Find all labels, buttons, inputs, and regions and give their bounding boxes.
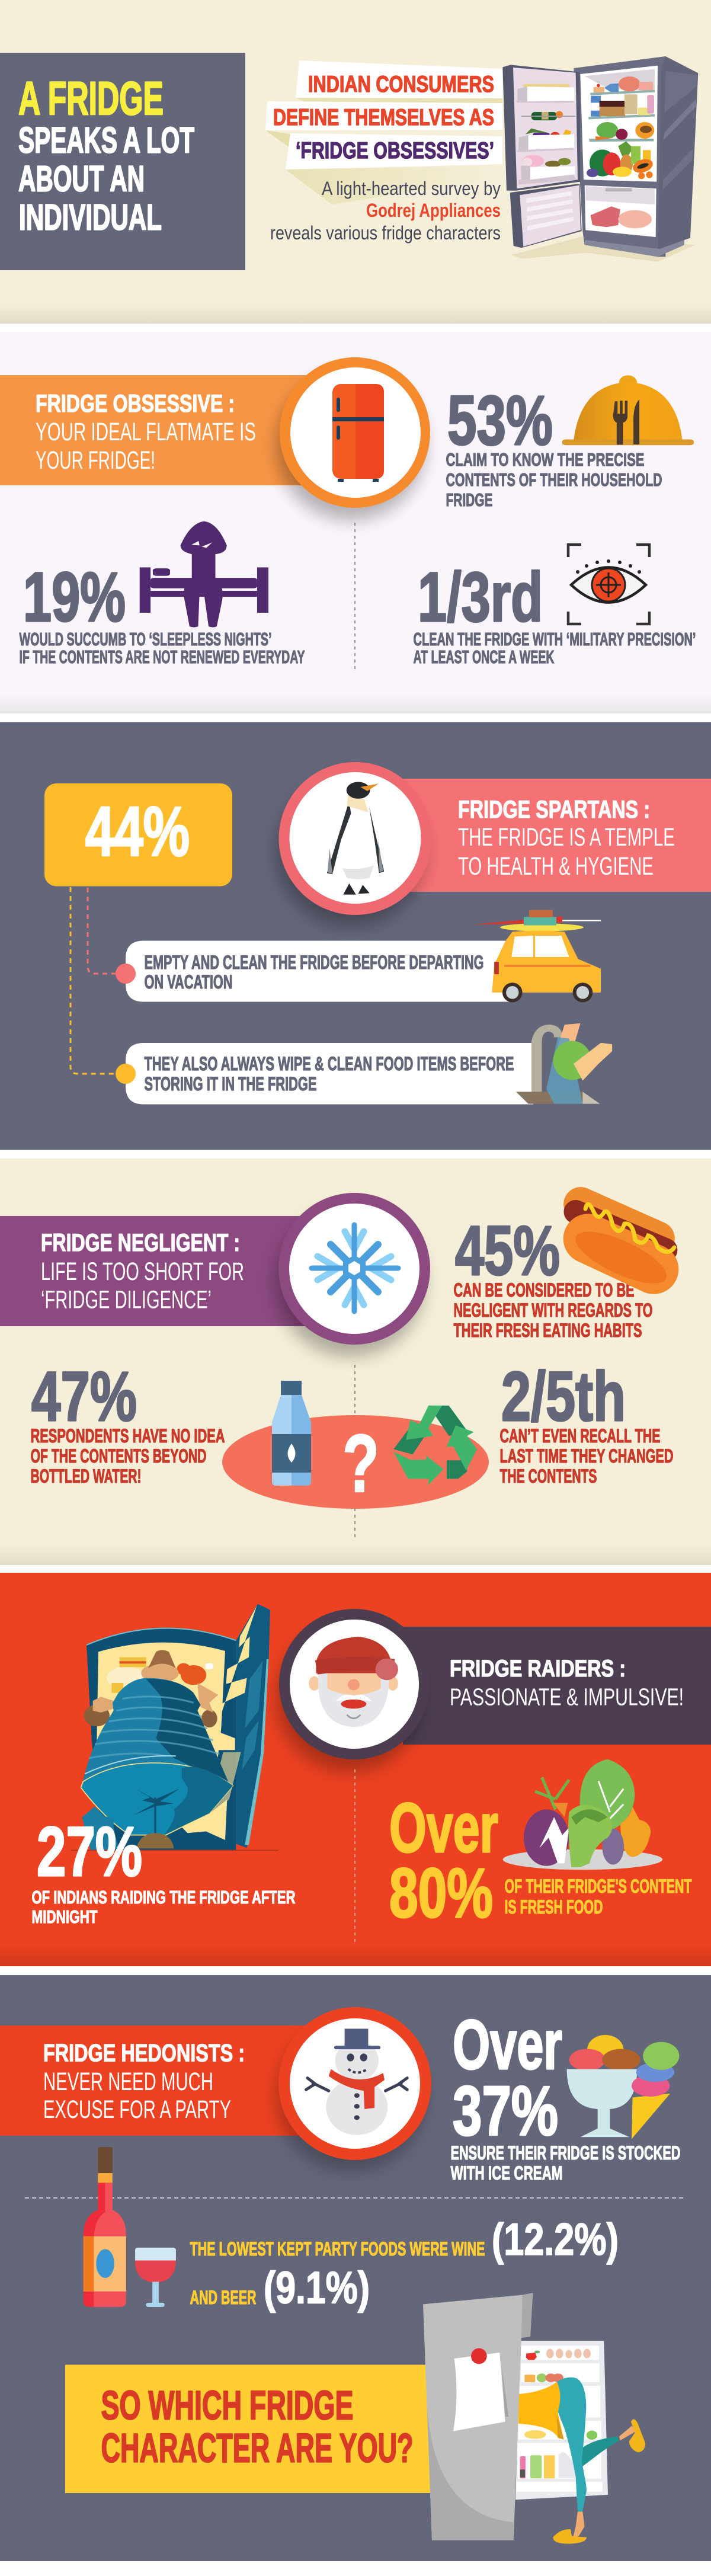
heading band: fridge hedonists: NEVER NEED MUCH — [43, 2068, 213, 2096]
heading band: fridge obsessive — [0, 375, 314, 485]
stat: 27%: 27% — [37, 1813, 142, 1891]
ribbon headline — [265, 60, 502, 204]
stat: over 37%: Over — [453, 2006, 562, 2084]
stat: party foods: (12.2%) — [492, 2215, 619, 2265]
heading band: fridge spartans — [403, 779, 711, 892]
stat: 19%: IF THE CONTENTS ARE NOT RENEWED EVERYDAY — [19, 647, 305, 667]
badge: penguin — [278, 762, 431, 915]
stat: 45% — [454, 1212, 653, 1341]
divider line — [354, 523, 356, 670]
heading band: fridge negligent: ‘FRIDGE DILIGENCE’ — [41, 1286, 212, 1314]
badge: snowflake — [278, 1193, 430, 1345]
callout: closing question: CHARACTER ARE YOU? — [101, 2425, 414, 2471]
icon: washing vegetables at sink — [516, 1023, 612, 1104]
ribbon headline: ‘FRIDGE OBSESSIVES’ — [296, 138, 494, 164]
icon: vegetables on a plate — [503, 1759, 662, 1870]
stat: 47%: OF THE CONTENTS BEYOND — [31, 1445, 206, 1467]
callout: closing question: SO WHICH FRIDGE — [101, 2382, 353, 2428]
icon: car with luggage — [472, 910, 601, 1002]
icon: recycling arrows — [393, 1406, 477, 1485]
illustration: man raiding fridge at midnight — [71, 1604, 278, 1851]
stat: 1/3rd: 1/3rd — [418, 558, 543, 636]
fact: vacation: ON VACATION — [145, 971, 232, 993]
illustration: person leaning into fridge — [423, 2293, 645, 2544]
title block: ABOUT AN — [18, 159, 145, 199]
stat: 47%: BOTTLED WATER! — [31, 1465, 141, 1487]
icon: question ellipse — [222, 1415, 489, 1509]
panel: fridge raiders — [0, 1573, 711, 1966]
title block: SPEAKS A LOT — [18, 120, 194, 160]
stat: 53%: 53% — [447, 382, 553, 460]
stat: 27%: OF INDIANS RAIDING THE FRIDGE AFTER — [32, 1887, 296, 1908]
title block — [0, 53, 245, 270]
icon: open fridge full of food — [502, 56, 698, 262]
stat: party foods — [190, 2215, 619, 2313]
survey note: Godrej Appliances — [366, 200, 501, 221]
divider line — [354, 1769, 356, 1942]
title block: INDIVIDUAL — [19, 197, 162, 237]
stat: 47%: 47% — [31, 1358, 137, 1436]
fact: wipe food: THEY ALSO ALWAYS WIPE & CLEAN FOOD ITEMS BEFORE — [145, 1053, 514, 1074]
fact: wipe food: STORING IT IN THE FRIDGE — [145, 1073, 316, 1095]
stat: over 80%: 80% — [389, 1854, 493, 1932]
stat: 2/5th — [500, 1358, 673, 1487]
stat: 53% — [446, 382, 662, 510]
panel: fridge spartans — [0, 722, 711, 1150]
fact: vacation: EMPTY AND CLEAN THE FRIDGE BEFORE DEPARTING — [145, 952, 483, 973]
stat: over 37%: 37% — [453, 2072, 558, 2150]
stat: over 37%: WITH ICE CREAM — [450, 2162, 563, 2184]
badge: orange fridge icon — [280, 357, 430, 508]
stat: party foods: (9.1%) — [264, 2263, 370, 2313]
stat: 45%: 45% — [455, 1212, 560, 1290]
survey note — [270, 178, 501, 244]
heading band: fridge obsessive: YOUR IDEAL FLATMATE IS — [36, 418, 256, 446]
divider line — [354, 1365, 356, 1538]
ribbon headline: INDIAN CONSUMERS — [308, 72, 494, 97]
stat: 2/5th: 2/5th — [501, 1358, 626, 1436]
stat: 53%: FRIDGE — [446, 489, 493, 510]
callout: closing question — [65, 2364, 433, 2493]
heading band: fridge hedonists — [0, 2025, 314, 2136]
icon: target eye — [568, 545, 649, 624]
stat: 47%: RESPONDENTS HAVE NO IDEA — [31, 1425, 225, 1447]
heading band: fridge spartans: FRIDGE SPARTANS : — [458, 795, 650, 823]
icon: water bottle — [272, 1381, 311, 1486]
stat: over 80% — [389, 1789, 692, 1932]
divider line — [25, 2197, 686, 2199]
panel: intro header — [0, 0, 711, 324]
heading band: fridge obsessive: FRIDGE OBSESSIVE : — [36, 389, 235, 417]
icon: hot dog — [555, 1182, 687, 1303]
survey note: A light-hearted survey by — [322, 178, 501, 199]
heading band: fridge negligent — [0, 1216, 314, 1326]
icon: sleepless person on bed — [140, 521, 268, 628]
heading band: fridge raiders — [403, 1627, 711, 1745]
icon: ice cream bowl and cone — [567, 2035, 679, 2139]
heading band: fridge hedonists: EXCUSE FOR A PARTY — [43, 2095, 231, 2124]
stat: 1/3rd — [414, 558, 696, 667]
stat: 44% box: 44% — [85, 793, 190, 871]
stat: 44% box — [44, 783, 232, 887]
stat: over 80%: IS FRESH FOOD — [505, 1896, 603, 1918]
heading band: fridge negligent: FRIDGE NEGLIGENT : — [41, 1228, 240, 1256]
stat: party foods: AND BEER — [190, 2287, 256, 2308]
icon: dinner cloche with fork and knife — [562, 375, 694, 445]
stat: 27%: MIDNIGHT — [32, 1906, 98, 1927]
stat: 19% — [19, 558, 305, 667]
icon: question ellipse: ? — [342, 1418, 379, 1509]
panel: fridge negligent — [0, 1159, 711, 1565]
stat: over 37% — [450, 2006, 680, 2184]
heading band: fridge raiders: FRIDGE RAIDERS : — [450, 1656, 626, 1682]
badge: santa face — [279, 1609, 430, 1759]
survey note: reveals various fridge characters — [270, 222, 501, 244]
title block: A FRIDGE — [18, 72, 164, 124]
stat: 1/3rd: AT LEAST ONCE A WEEK — [414, 647, 555, 667]
stat: 47% — [31, 1358, 225, 1487]
stat: 19%: WOULD SUCCUMB TO ‘SLEEPLESS NIGHTS’ — [19, 629, 271, 649]
heading band: fridge obsessive: YOUR FRIDGE! — [36, 446, 155, 475]
fact: wipe food — [116, 1043, 533, 1105]
stat: party foods: THE LOWEST KEPT PARTY FOODS WERE WINE — [190, 2238, 485, 2260]
connector lines — [71, 887, 116, 1074]
icon: wine bottle and glass — [84, 2147, 176, 2307]
stat: 19%: 19% — [23, 558, 126, 636]
fact: vacation — [116, 941, 513, 1001]
heading band: fridge negligent: LIFE IS TOO SHORT FOR — [41, 1257, 244, 1286]
ribbon headline: DEFINE THEMSELVES AS — [273, 105, 494, 130]
panel: fridge hedonists — [0, 1975, 711, 2561]
panel: fridge obsessive — [0, 332, 711, 713]
stat: over 80%: Over — [389, 1789, 498, 1867]
heading band: fridge hedonists: FRIDGE HEDONISTS : — [43, 2039, 245, 2067]
badge: snowman — [278, 2007, 431, 2160]
stat: 27% — [32, 1813, 296, 1927]
stat: 2/5th: THE CONTENTS — [500, 1465, 597, 1487]
